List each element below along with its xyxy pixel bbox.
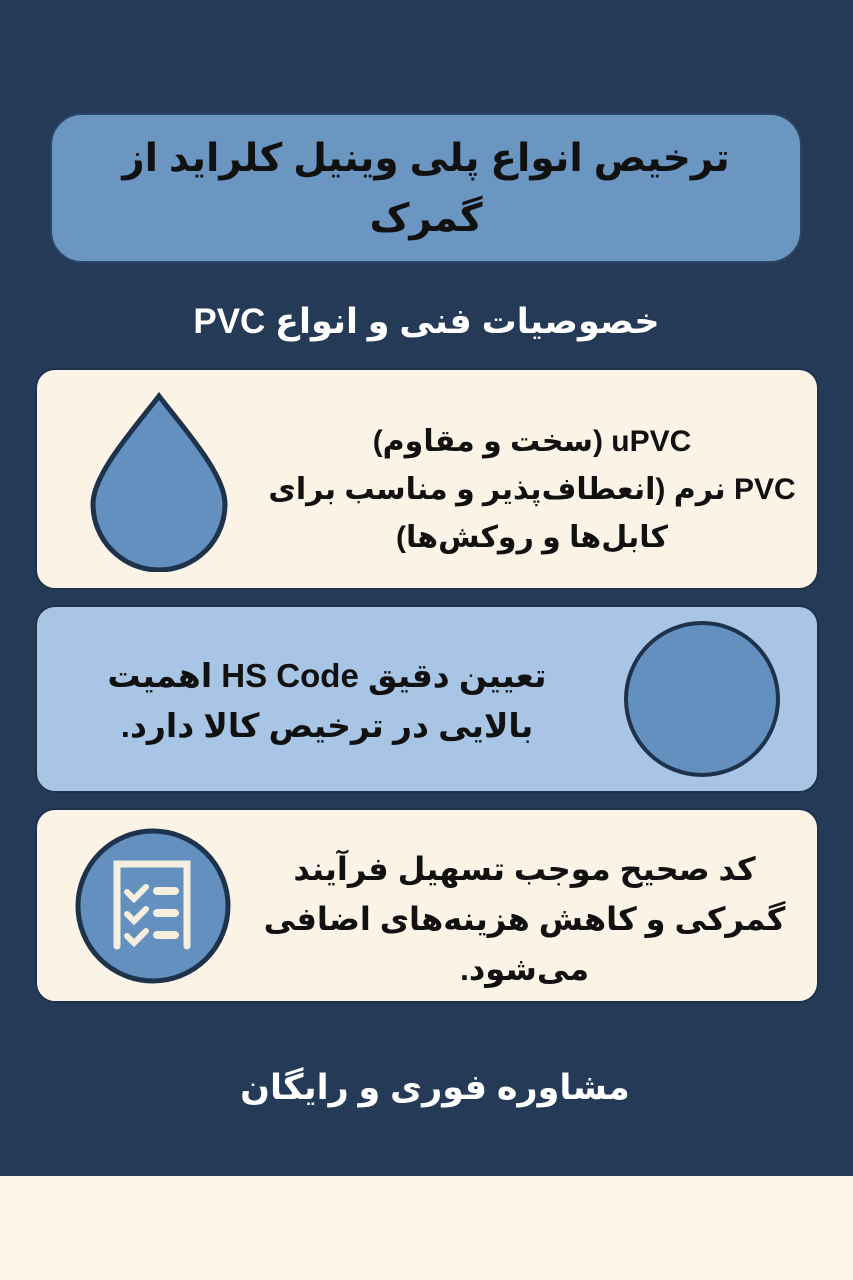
subtitle: خصوصیات فنی و انواع PVC bbox=[193, 302, 660, 341]
panel: types bbox=[35, 368, 819, 590]
text: benefits: گمرکی و کاهش هزینه‌های اضافی bbox=[264, 901, 785, 937]
text: PVC types: PVC نرم (انعطاف‌پذیر و مناسب برای bbox=[268, 473, 796, 506]
title bbox=[50, 113, 802, 263]
panel: HS Code bbox=[35, 605, 819, 793]
text: HS code bbox=[107, 657, 547, 745]
text: PVC types: uPVC (سخت و مقاوم) bbox=[373, 425, 691, 458]
text: benefits bbox=[264, 849, 786, 988]
text: benefits: می‌شود. bbox=[460, 951, 589, 987]
icon: checklist bbox=[76, 828, 230, 984]
title: گمرک bbox=[369, 197, 483, 240]
icon: water drop bbox=[90, 392, 228, 572]
text: PVC types bbox=[268, 425, 796, 554]
panel: benefits bbox=[35, 808, 819, 1003]
text: PVC types: کابل‌ها و روکش‌ها) bbox=[396, 521, 668, 554]
footer text: مشاوره فوری و رایگان bbox=[240, 1068, 630, 1107]
text: HS code: تعیین دقیق HS Code اهمیت bbox=[107, 657, 547, 694]
icon: circle bbox=[624, 621, 780, 777]
title: ترخیص انواع پلی وینیل کلراید از bbox=[122, 137, 730, 180]
text: HS code: بالایی در ترخیص کالا دارد. bbox=[121, 707, 533, 744]
text: benefits: کد صحیح موجب تسهیل فرآیند bbox=[293, 851, 756, 887]
